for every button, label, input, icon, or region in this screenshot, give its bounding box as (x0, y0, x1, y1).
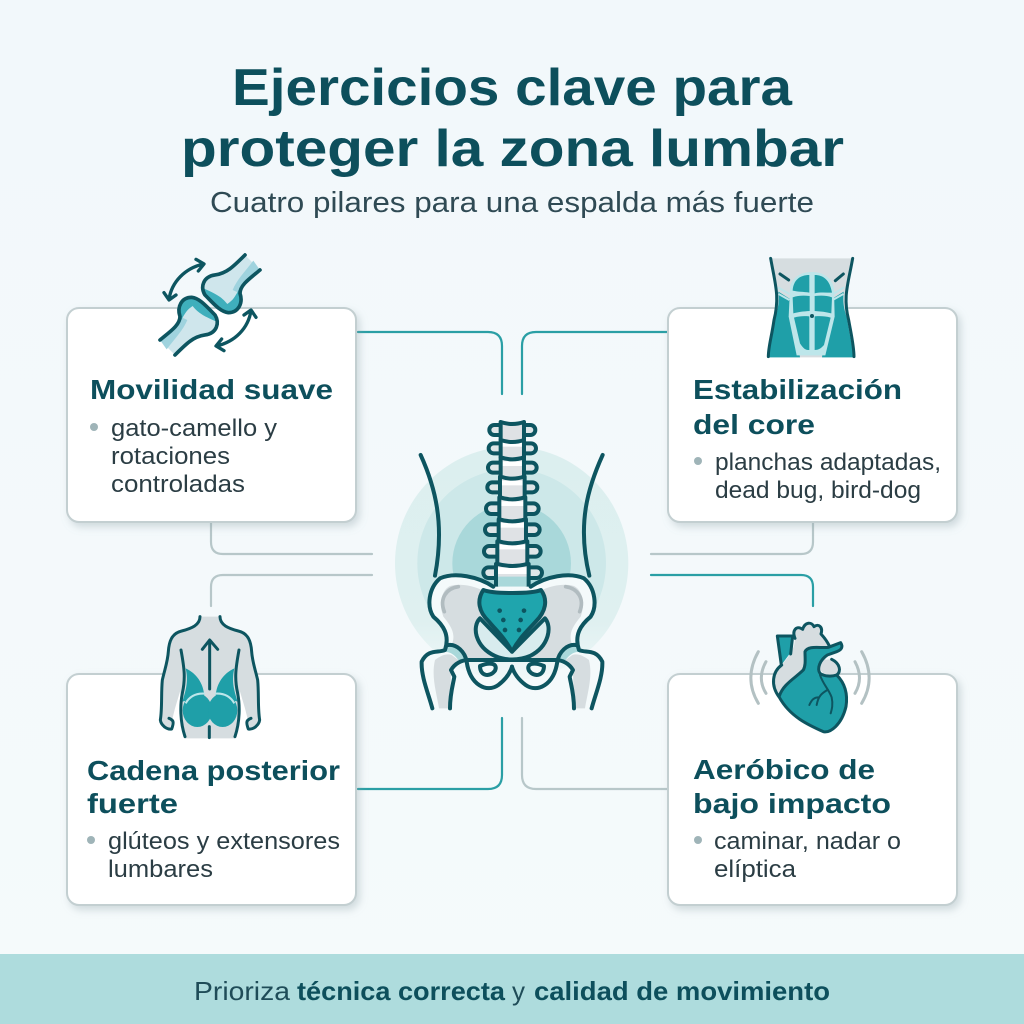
waist lines (421, 455, 603, 576)
heading: aeróbico de bajo impacto (693, 754, 891, 819)
footer band (0, 954, 1024, 1024)
pelvis (422, 575, 602, 708)
heading: estabilización del core (693, 374, 902, 440)
title: Ejercicios clave para (232, 59, 793, 117)
text: aeróbico bullet: elíptica (714, 856, 797, 883)
footer text: y (512, 976, 525, 1006)
panel: cadena posterior fuerte (67, 674, 356, 905)
text: core bullet: planchas adaptadas, (715, 449, 941, 476)
text: core bullet (694, 449, 941, 504)
icon: abdominal core (768, 258, 854, 357)
central illustration: spine and pelvis (395, 422, 628, 708)
heading: cadena posterior fuerte: Cadena posterior (87, 755, 340, 786)
glow circles (395, 447, 628, 680)
heading: estabilización del core: Estabilización (693, 374, 902, 405)
text: cadena posterior bullet: lumbares (108, 856, 213, 883)
text: movilidad suave bullet: rotaciones (111, 443, 230, 470)
icon: heart (751, 623, 869, 732)
heading: estabilización del core: del core (693, 409, 815, 440)
footer text: Prioriza (194, 976, 291, 1006)
panel: movilidad suave (67, 308, 356, 522)
footer text: técnica correcta (297, 976, 506, 1006)
footer text (194, 976, 830, 1006)
text: movilidad suave bullet (90, 415, 277, 498)
subtitle: Cuatro pilares para una espalda más fuerte (210, 187, 814, 219)
text: cadena posterior bullet (87, 828, 340, 883)
text: movilidad suave bullet: gato-camello y (111, 415, 277, 442)
text: aeróbico bullet: caminar, nadar o (714, 828, 901, 855)
footer text: calidad de movimiento (534, 976, 830, 1006)
title (181, 59, 844, 178)
icon: joint with arrows (160, 255, 260, 355)
heading: movilidad suave: Movilidad suave (90, 374, 333, 405)
text: aeróbico bullet (694, 828, 901, 883)
title: proteger la zona lumbar (181, 120, 844, 178)
heading: aeróbico de bajo impacto: Aeróbico de (693, 754, 875, 785)
text: movilidad suave bullet: controladas (111, 471, 245, 498)
panel: aeróbico de bajo impacto (668, 674, 957, 905)
heading: cadena posterior fuerte (87, 755, 340, 819)
text: core bullet: dead bug, bird-dog (715, 477, 921, 504)
connector lines (211, 332, 813, 789)
heading: cadena posterior fuerte: fuerte (87, 788, 178, 819)
heading: aeróbico de bajo impacto: bajo impacto (693, 788, 891, 819)
text: cadena posterior bullet: glúteos y extensores (108, 828, 340, 855)
spine (483, 422, 542, 595)
icon: back and glutes (160, 617, 260, 738)
panel: estabilización del core (668, 308, 957, 522)
